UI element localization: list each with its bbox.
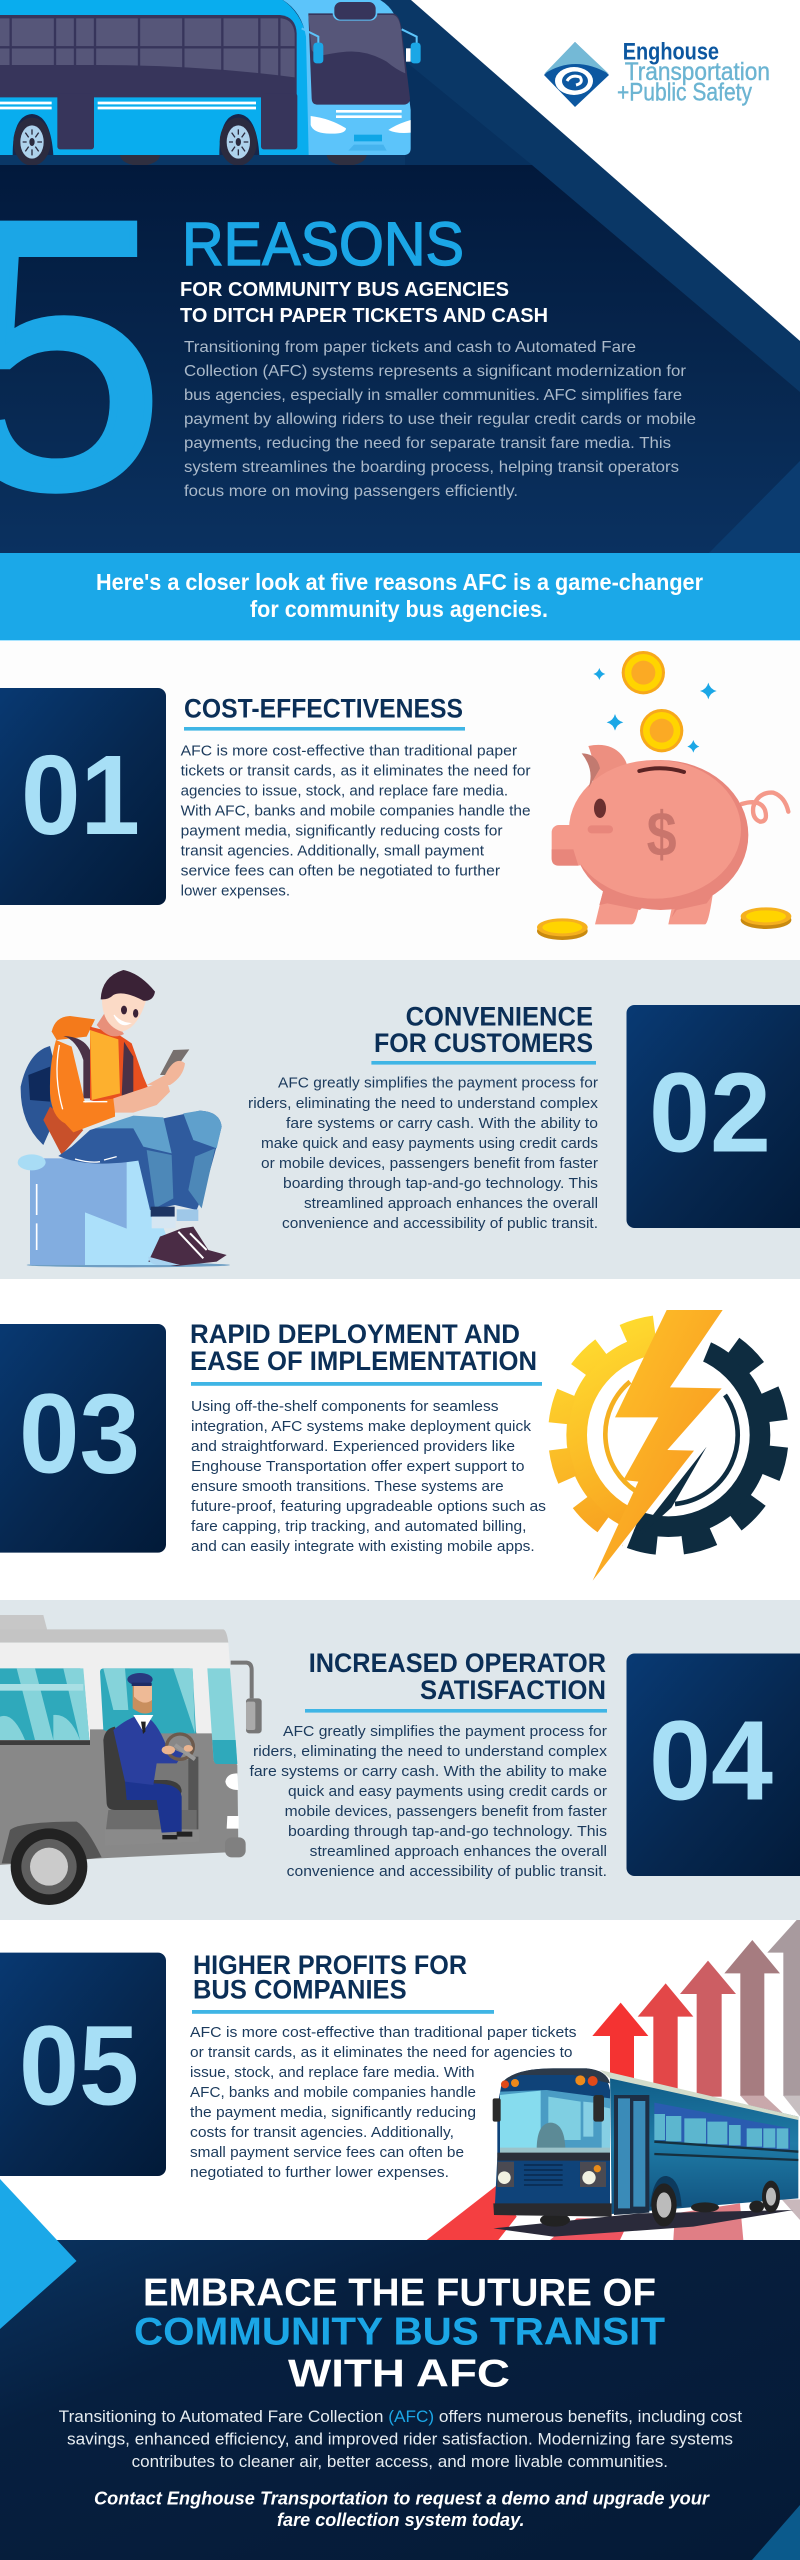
heading 03: RAPID DEPLOYMENT AND (190, 1319, 520, 1349)
number box 05 (0, 1953, 166, 2176)
body text 01: AFC is more cost-effective than traditional paper (181, 742, 517, 760)
body text 02: riders, eliminating the need to understand complex (248, 1095, 599, 1112)
body text 02: boarding through tap-and-go technology. This (283, 1175, 598, 1192)
banner: closer look: Here's a closer look at five reasons AFC is a game-changer (96, 569, 703, 595)
closing text: Transitioning to Automated Fare Collection (AFC) offers numerous benefits, including cost (59, 2407, 742, 2426)
illustration: bus driver in bus (0, 1615, 262, 1905)
body text 05: small payment service fees can often be (190, 2144, 464, 2161)
body text 05: negotiated to further lower expenses. (190, 2164, 449, 2181)
body text 05 (190, 2024, 576, 2181)
intro text: Transitioning from paper tickets and cash to Automated Fare (184, 339, 636, 356)
panel: reason 05 higher profits (0, 1920, 800, 2240)
body text 02 (248, 1075, 599, 1232)
body text 04: convenience and accessibility of public transit. (287, 1863, 607, 1880)
body text 03: and straightforward. Experienced providers like (191, 1438, 515, 1455)
heading 05: BUS COMPANIES (193, 1974, 407, 2004)
hero panel (0, 0, 800, 567)
body text 05: AFC, banks and mobile companies handle (190, 2084, 476, 2101)
body text 04: AFC greatly simplifies the payment process for (283, 1723, 607, 1740)
body text 04: boarding through tap-and-go technology. This (288, 1823, 607, 1840)
body text 05: costs for transit agencies. Additionally, (190, 2124, 454, 2141)
body text 04: streamlined approach enhances the overall (310, 1843, 607, 1860)
number box 03 (0, 1324, 166, 1553)
body text 03: fare capping, trip tracking, and automated billing, (191, 1518, 526, 1535)
illustration: blue bus (0, 0, 421, 166)
heading 02 (371, 1002, 596, 1065)
closing heading: EMBRACE THE FUTURE OF (143, 2272, 656, 2315)
number box 02 (626, 1005, 800, 1228)
intro text: Collection (AFC) systems represents a significant modernization for (184, 363, 687, 380)
closing text: contributes to cleaner air, better access, and more livable communities. (132, 2452, 668, 2471)
logo: Enghouse Transportation + Public Safety: +Public Safety (617, 79, 752, 107)
panel: closing call to action (0, 2179, 800, 2560)
heading 03: EASE OF IMPLEMENTATION (190, 1346, 537, 1376)
number box 04 (626, 1654, 800, 1876)
closing heading: WITH AFC (288, 2352, 510, 2396)
intro text: bus agencies, especially in smaller communities. AFC simplifies fare (184, 387, 682, 404)
heading 01: COST-EFFECTIVENESS (184, 694, 463, 724)
icon: eye diamond (544, 42, 609, 107)
body text 03: integration, AFC systems make deployment quick (191, 1418, 532, 1435)
body text 01: payment media, significantly reducing costs for (181, 822, 503, 840)
body text 01: service fees can often be negotiated to further (181, 862, 500, 880)
body text 01: transit agencies. Additionally, small payment (181, 842, 485, 860)
body text 01 (181, 742, 531, 900)
body text 03: Using off-the-shelf components for seamless (191, 1398, 498, 1415)
heading: reasons: REASONS (182, 210, 464, 278)
heading: reasons: TO DITCH PAPER TICKETS AND CASH (180, 305, 548, 327)
number box 03: 03 (19, 1371, 140, 1497)
body text 02: make quick and easy payments using credit cards (261, 1135, 598, 1152)
intro text: focus more on moving passengers efficiently. (184, 483, 518, 500)
closing text (59, 2407, 742, 2471)
body text 02: streamlined approach enhances the overall (304, 1195, 598, 1212)
number box 01 (0, 688, 166, 905)
body text 02: AFC greatly simplifies the payment process for (278, 1075, 598, 1092)
body text 04: riders, eliminating the need to understand complex (253, 1743, 608, 1760)
number box 01: 01 (21, 732, 140, 858)
body text 05: the payment media, significantly reducing (190, 2104, 476, 2121)
intro text: system streamlines the boarding process, helping transit operators (184, 459, 679, 476)
icon: blue arrow (0, 2179, 76, 2329)
body text 02: or mobile devices, passengers benefit from faster (261, 1155, 598, 1172)
body text 03 (191, 1398, 546, 1555)
body text 05: issue, stock, and replace fare media. With (190, 2064, 474, 2081)
body text 01: agencies to issue, stock, and replace fare media. (181, 782, 508, 800)
heading: reasons: FOR COMMUNITY BUS AGENCIES (180, 279, 509, 301)
illustration: piggy bank: $ (647, 800, 677, 870)
logo: Enghouse Transportation + Public Safety: Transportation (625, 58, 770, 86)
panel: reason 01 cost-effectiveness (0, 640, 800, 960)
heading 04 (305, 1648, 607, 1713)
body text 04: mobile devices, passengers benefit from faster (285, 1803, 607, 1820)
body text 03: Enghouse Transportation offer expert support to (191, 1458, 524, 1475)
body text 01: lower expenses. (181, 882, 290, 900)
body text 01: tickets or transit cards, as it eliminates the need for (181, 762, 531, 780)
panel: reason 04 operator satisfaction (0, 1600, 800, 1920)
illustration: man with phone sitting on a box (18, 970, 230, 1267)
contact call to action: Contact Enghouse Transportation to request a demo and upgrade your (94, 2488, 710, 2508)
heading 05 (192, 1950, 494, 2014)
closing heading: COMMUNITY BUS TRANSIT (134, 2310, 665, 2354)
illustration: rising arrows and blue bus (427, 1920, 800, 2240)
body text 05: or transit cards, as it eliminates the need for agencies to (190, 2044, 572, 2061)
logo: Enghouse Transportation + Public Safety: Enghouse (623, 38, 719, 66)
body text 04: fare systems or carry cash. With the ability to make (250, 1763, 607, 1780)
heading 04: INCREASED OPERATOR (309, 1648, 606, 1678)
number box 02: 02 (649, 1050, 771, 1176)
intro text: payments, reducing the need for separate transit fare media. This (184, 435, 671, 452)
body text 01: With AFC, banks and mobile companies handle the (181, 802, 531, 820)
body text 03: and can easily integrate with existing mobile apps. (191, 1538, 535, 1555)
closing text: savings, enhanced efficiency, and improved rider satisfaction. Modernizing fare systems (67, 2430, 733, 2448)
body text 02: convenience and accessibility of public transit. (282, 1215, 598, 1232)
contact call to action (94, 2488, 710, 2530)
body text 05: AFC is more cost-effective than traditional paper tickets (190, 2024, 576, 2041)
illustration: piggy bank (537, 651, 791, 940)
body text 04 (250, 1723, 608, 1880)
number box 04: 04 (649, 1698, 773, 1824)
intro text (184, 339, 696, 500)
heading 02: CONVENIENCE (406, 1002, 593, 1032)
heading: reasons (180, 210, 548, 327)
icon: gear with lightning bolt (547, 1310, 789, 1581)
heading 02: FOR CUSTOMERS (374, 1028, 593, 1058)
heading 05: HIGHER PROFITS FOR (193, 1950, 467, 1980)
contact call to action: fare collection system today. (277, 2510, 524, 2530)
banner: closer look: for community bus agencies. (250, 596, 548, 622)
heading 03 (190, 1319, 542, 1386)
body text 03: ensure smooth transitions. These systems are (191, 1478, 504, 1495)
body text 02: fare systems or carry cash. With the ability to (286, 1115, 598, 1132)
body text 03: future-proof, featuring upgradeable options such as (191, 1498, 546, 1515)
body text 04: quick and easy payments using credit cards or (288, 1783, 607, 1800)
panel: reason 03 rapid deployment (0, 1310, 788, 1580)
heading 04: SATISFACTION (420, 1675, 606, 1705)
banner: closer look (0, 553, 800, 640)
logo: Enghouse Transportation + Public Safety (544, 38, 770, 107)
intro text: payment by allowing riders to use their regular credit cards or mobile (184, 411, 696, 428)
closing heading (134, 2272, 665, 2396)
number box 05: 05 (19, 2002, 139, 2128)
panel: reason 02 convenience (0, 960, 800, 1279)
